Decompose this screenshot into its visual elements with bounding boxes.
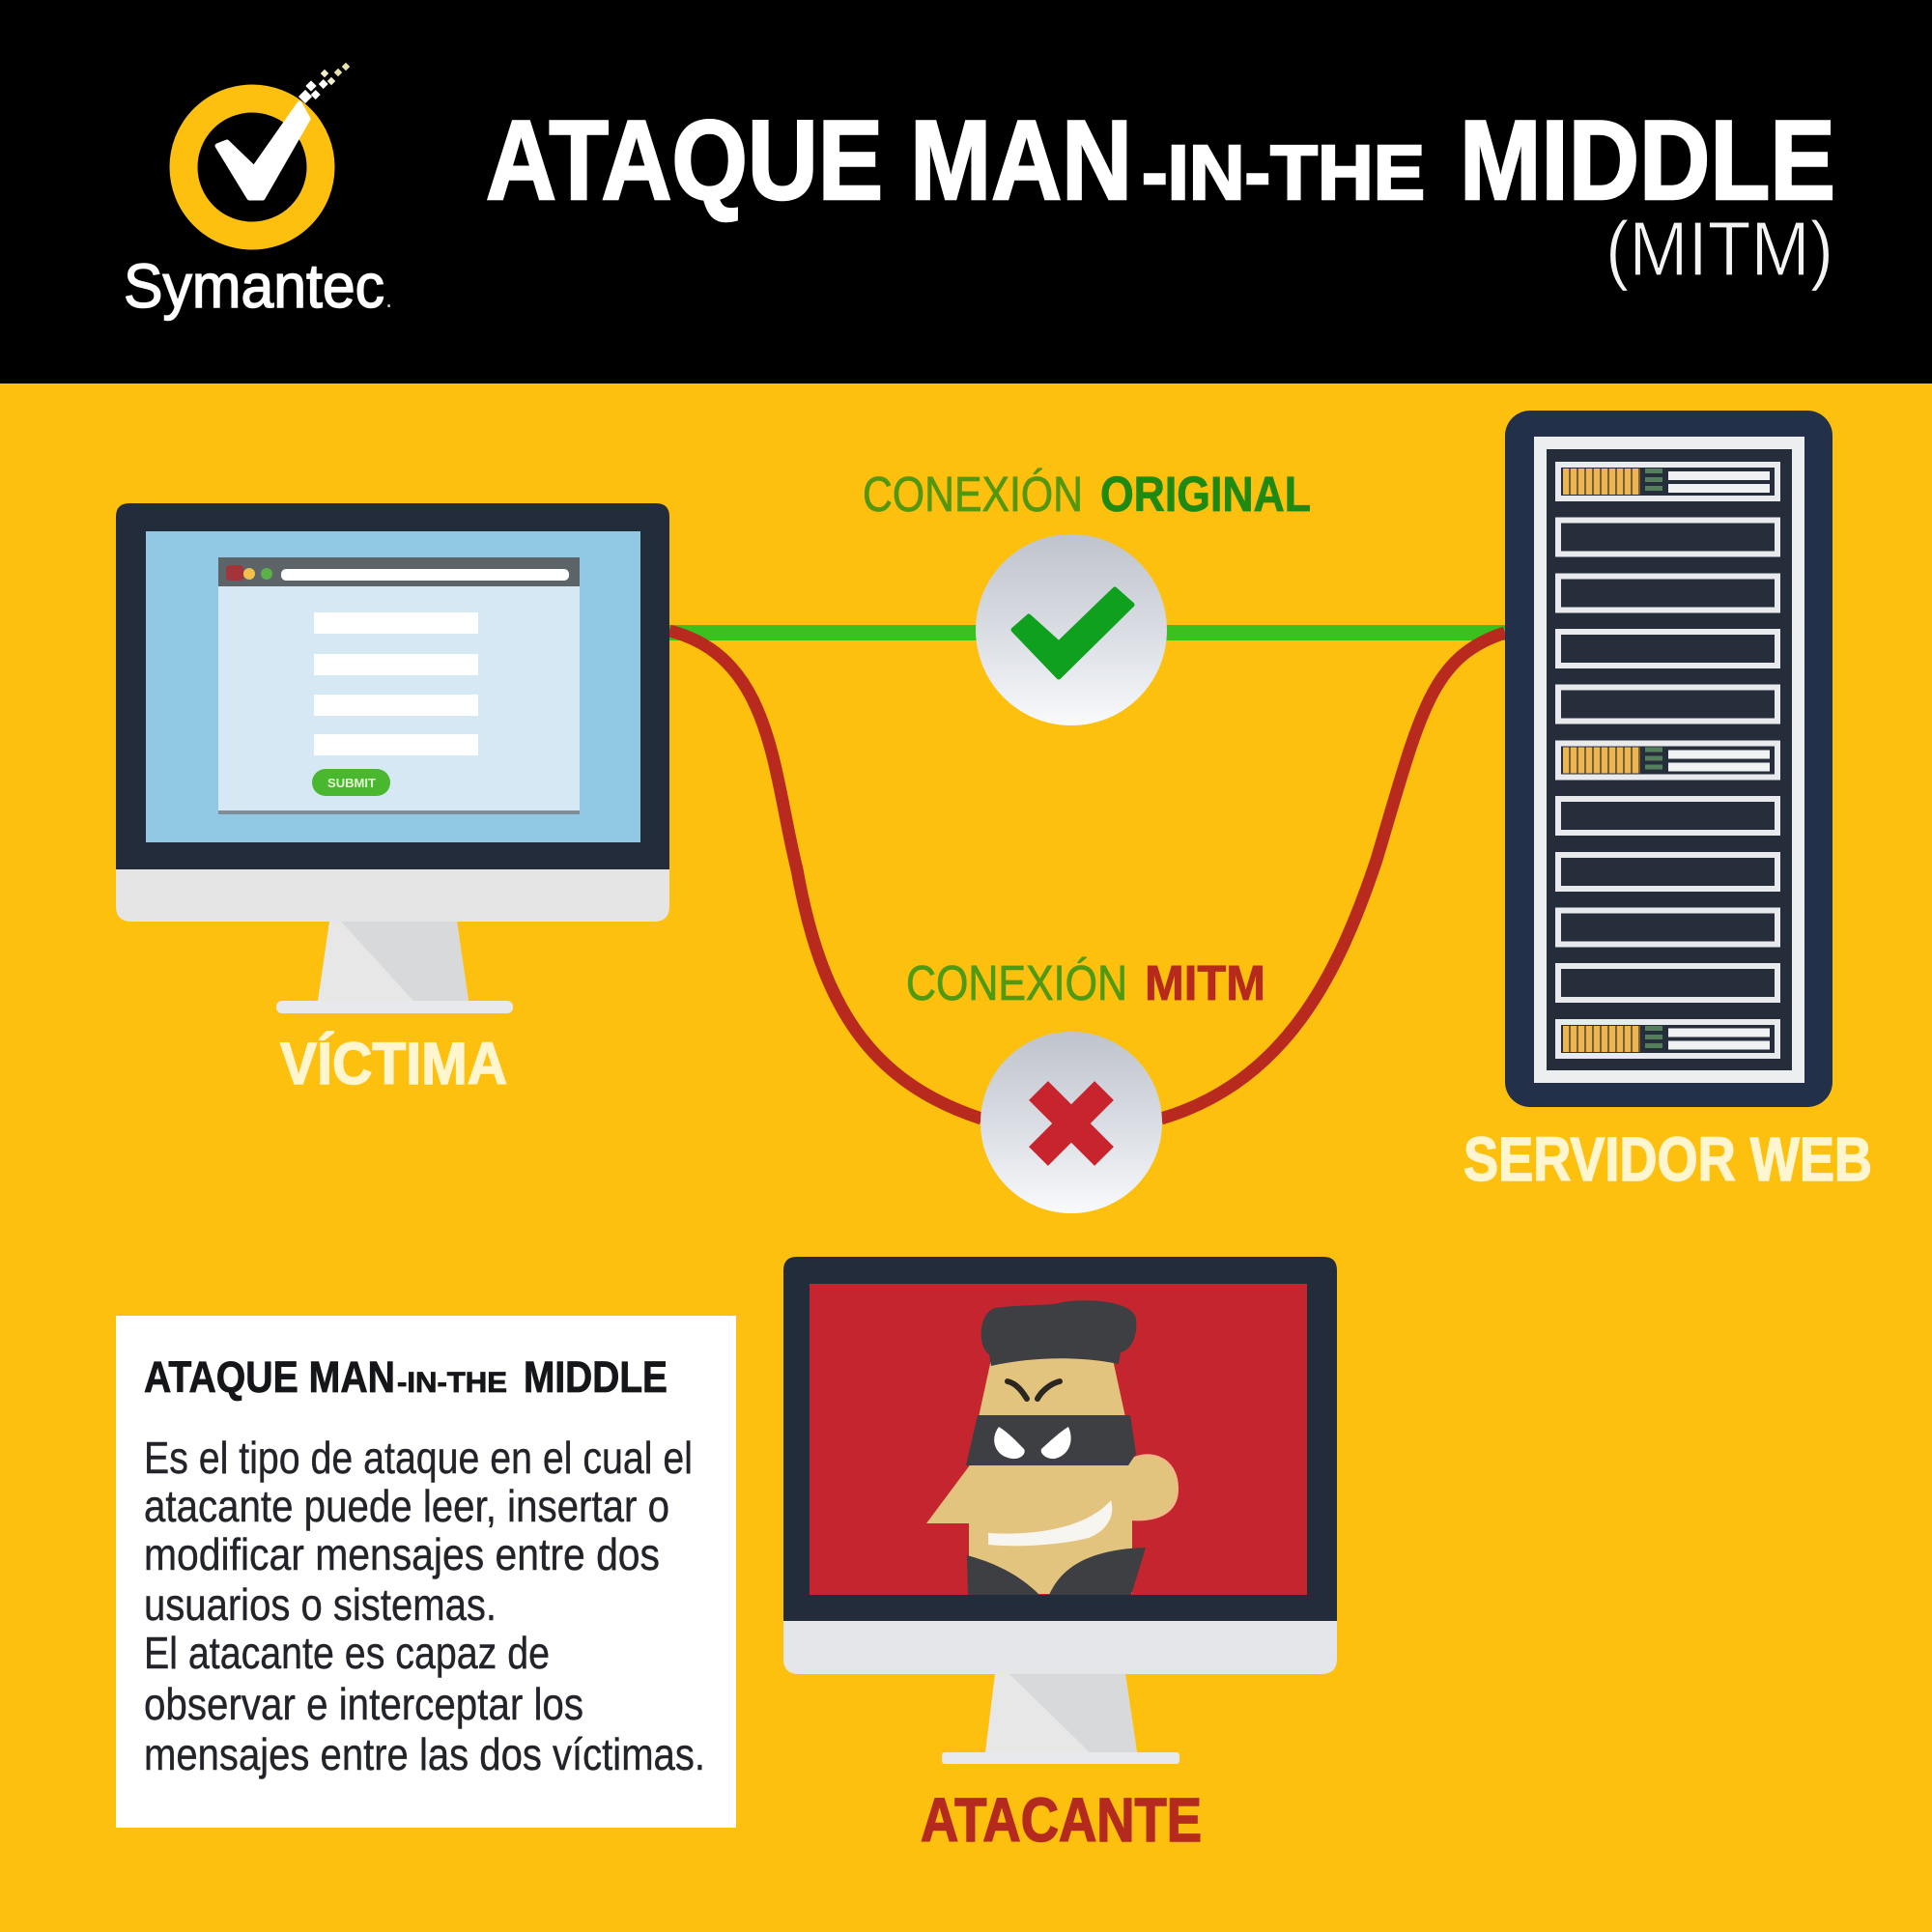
- form fields: [314, 612, 478, 755]
- title: [486, 97, 1835, 223]
- monitor screen: [146, 531, 640, 842]
- panel heading: [144, 1352, 668, 1402]
- panel heading: MIDDLE: [524, 1352, 668, 1402]
- text panel: definition: [116, 1316, 736, 1828]
- red MITM connection curve: [669, 631, 1505, 1119]
- logo: Symantec: [124, 63, 392, 321]
- active server unit: bottom: [1563, 1026, 1770, 1052]
- label: original connection: [863, 467, 1311, 522]
- panel heading: -IN-THE: [397, 1367, 507, 1399]
- active server unit: top: [1563, 469, 1770, 495]
- icon: red cross: [980, 1032, 1162, 1213]
- label: MITM connection: MITM: [1145, 955, 1265, 1010]
- attacker frame: [783, 1257, 1337, 1621]
- eyebrows: [1008, 1381, 1060, 1399]
- title: ATAQUE MAN: [486, 97, 1132, 223]
- monitor chin: [116, 869, 669, 922]
- submit button: [312, 769, 390, 796]
- panel body text: mensajes entre las dos víctimas.: [144, 1729, 705, 1779]
- logo wordmark: Symantec: [124, 251, 384, 321]
- monitor frame: [116, 503, 669, 869]
- panel body text: usuarios o sistemas.: [144, 1579, 497, 1630]
- server rack: [1505, 411, 1833, 1107]
- monitor: victim: [116, 503, 669, 1013]
- panel body text: Es el tipo de ataque en el cual el: [144, 1433, 693, 1483]
- forehead: [979, 1350, 1125, 1417]
- monitor stand: [276, 922, 513, 1013]
- panel body text: [144, 1433, 705, 1779]
- logo wordmark: .: [385, 284, 392, 313]
- panel heading: ATAQUE MAN: [144, 1352, 395, 1402]
- ear: [1125, 1455, 1178, 1520]
- header band: [0, 0, 1932, 384]
- collar: [967, 1548, 1146, 1595]
- label: victim: VÍCTIMA: [280, 1031, 507, 1096]
- label: attacker: ATACANTE: [921, 1785, 1202, 1855]
- panel body text: modificar mensajes entre dos: [144, 1529, 660, 1579]
- panel body text: atacante puede leer, insertar o: [144, 1481, 669, 1531]
- lower face: [926, 1463, 1132, 1594]
- attacker chin: [783, 1621, 1337, 1674]
- monitor: attacker: [783, 1257, 1337, 1764]
- title: MIDDLE: [1460, 97, 1835, 223]
- hair: [981, 1300, 1136, 1366]
- subtitle: (MITM): [1605, 206, 1833, 292]
- smile: [988, 1500, 1112, 1546]
- label: MITM connection: CONEXIÓN: [906, 955, 1127, 1010]
- icon: green check: [976, 534, 1167, 725]
- logo checkmark: [217, 63, 350, 198]
- character: masked attacker: [926, 1300, 1178, 1595]
- panel body text: El atacante es capaz de: [144, 1628, 550, 1678]
- logo ring: [184, 99, 321, 236]
- green original connection line: [669, 625, 1505, 640]
- panel body text: observar e interceptar los: [144, 1679, 583, 1729]
- mask: [966, 1415, 1136, 1465]
- attacker stand: [942, 1674, 1179, 1764]
- attacker screen: [810, 1284, 1307, 1595]
- server slots: [1558, 465, 1777, 1056]
- label: original connection: ORIGINAL: [1100, 467, 1311, 522]
- label: original connection: CONEXIÓN: [863, 467, 1083, 522]
- title: -IN-THE: [1142, 129, 1425, 215]
- eyes: [994, 1427, 1071, 1459]
- browser window: [218, 557, 580, 814]
- submit button: SUBMIT: [327, 776, 376, 790]
- rack inner frame: [1540, 442, 1799, 1076]
- active server unit: middle: [1563, 748, 1770, 773]
